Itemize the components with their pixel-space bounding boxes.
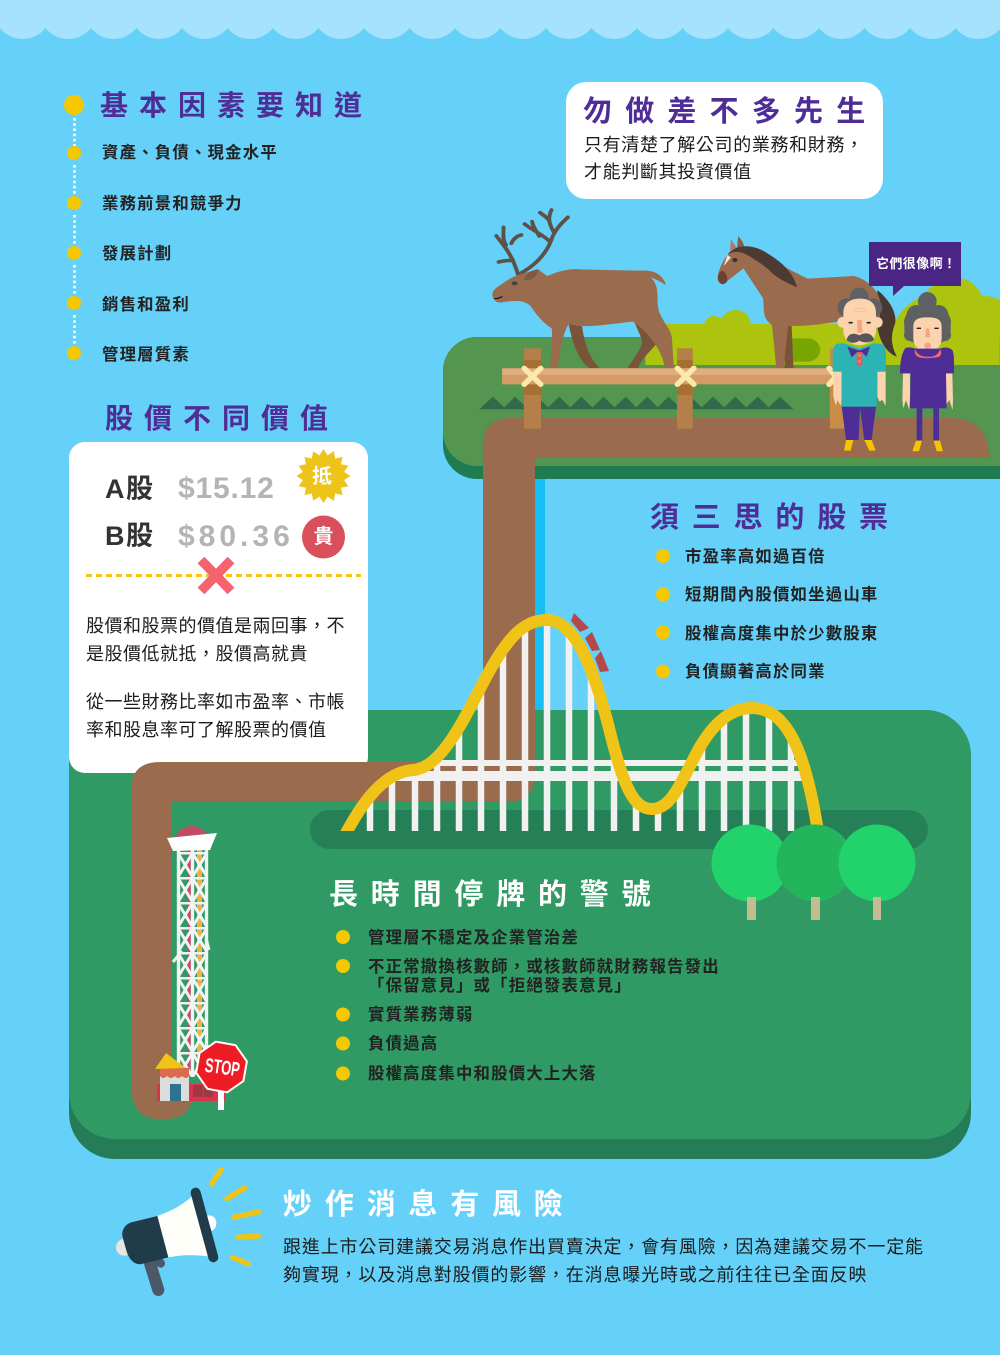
panel: basic factors list: 銷售和盈利: [102, 295, 190, 314]
badge: cheap: 抵: [312, 465, 332, 488]
grass tufts: [479, 397, 793, 409]
badge: expensive: 貴: [314, 525, 334, 548]
panel: speculation news risk: 跟進上市公司建議交易消息作出買賣決定，會有風險，因為建議交易不一定能: [283, 1237, 924, 1257]
panel: basic factors list: [64, 90, 373, 364]
panel: share price card: $15.12: [178, 472, 275, 505]
panel: suspension warning signs: 負債過高: [368, 1034, 438, 1053]
panel: speculation news risk: 炒作消息有風險: [283, 1188, 576, 1221]
heading: stock price vs value: 股價不同價值: [105, 403, 339, 434]
icon: megaphone: [116, 1170, 259, 1290]
panel: stocks to think twice about: 市盈率高如過百倍: [685, 547, 826, 566]
panel: callout not Mr. Almost: 勿做差不多先生: [583, 95, 878, 128]
panel: share price card: 率和股息率可了解股票的價值: [86, 720, 326, 740]
stop sign: STOP: [203, 1055, 241, 1081]
dashed divider with cross: [86, 560, 361, 591]
panel: suspension warning signs: 「保留意見」或「拒絕發表意見」: [368, 976, 632, 995]
panel: stocks to think twice about: 負債顯著高於同業: [685, 662, 826, 681]
three trees: [712, 824, 916, 920]
speech bubble: 它們很像啊！: [876, 256, 956, 271]
panel: share price card: $80.36: [178, 520, 294, 553]
tower drop ride: [167, 826, 217, 1077]
panel: suspension warning signs: 長時間停牌的警號: [329, 878, 663, 911]
panel: stocks to think twice about: 股權高度集中於少數股東: [685, 624, 878, 643]
panel: stocks to think twice about: 須三思的股票: [650, 501, 901, 534]
panel: basic factors list: 發展計劃: [102, 244, 172, 263]
badge: expensive: [302, 516, 345, 558]
speech bubble: [869, 242, 961, 296]
stop sign: [194, 1039, 249, 1110]
panel: callout not Mr. Almost: 才能判斷其投資價值: [584, 162, 752, 182]
panel: upper green field: [443, 337, 1000, 479]
roller coaster: [340, 613, 820, 845]
panel: basic factors list: 業務前景和競爭力: [102, 194, 243, 213]
panel: speculation news risk: 夠實現，以及消息對股價的影響，在消息曝光時或之前往往已全面反映: [283, 1265, 867, 1285]
panel: suspension warning signs: 實質業務薄弱: [368, 1005, 474, 1024]
panel: suspension warning signs: [329, 878, 720, 1083]
brown road: [131, 418, 989, 1119]
panel: callout not Mr. Almost: [566, 82, 883, 199]
panel: suspension warning signs: 股權高度集中和股價大上大落: [368, 1064, 597, 1083]
panel: share price card: 是股價低就抵，股價高就貴: [86, 644, 308, 664]
deer: [492, 210, 674, 368]
cloud scallop band: [0, 0, 1000, 39]
person: old man: [833, 288, 886, 451]
panel: lower green field: [69, 710, 971, 1159]
red brake segments: [571, 613, 609, 672]
panel: share price card: 股價和股票的價值是兩回事，不: [86, 616, 345, 636]
panel: stocks to think twice about: 短期間內股價如坐過山車: [685, 585, 878, 604]
panel: share price card: B股: [105, 521, 154, 551]
badge: cheap: [296, 449, 350, 503]
panel: basic factors list: 管理層質素: [102, 345, 190, 364]
panel: share price card: [69, 442, 368, 773]
panel: basic factors list: 資產、負債、現金水平: [102, 143, 278, 162]
panel: suspension warning signs: 管理層不穩定及企業管治差: [368, 928, 579, 947]
panel: stocks to think twice about: [650, 501, 901, 681]
horse: [718, 236, 897, 368]
panel: callout not Mr. Almost: 只有清楚了解公司的業務和財務，: [584, 135, 864, 155]
wooden fence: [502, 348, 846, 429]
panel: share price card: A股: [105, 474, 154, 504]
panel: basic factors list: 基本因素要知道: [100, 90, 373, 121]
shop and base: [155, 1053, 225, 1101]
person: old woman: [900, 292, 954, 451]
hills and bushes: [645, 278, 1000, 365]
panel: share price card: 從一些財務比率如市盈率、市帳: [86, 692, 345, 712]
dark ground band: [310, 810, 928, 849]
lighter strip beside the road: [535, 479, 545, 711]
panel: suspension warning signs: 不正常撤換核數師，或核數師就財務報告發出: [368, 957, 720, 976]
panel: speculation news risk: [283, 1188, 924, 1285]
